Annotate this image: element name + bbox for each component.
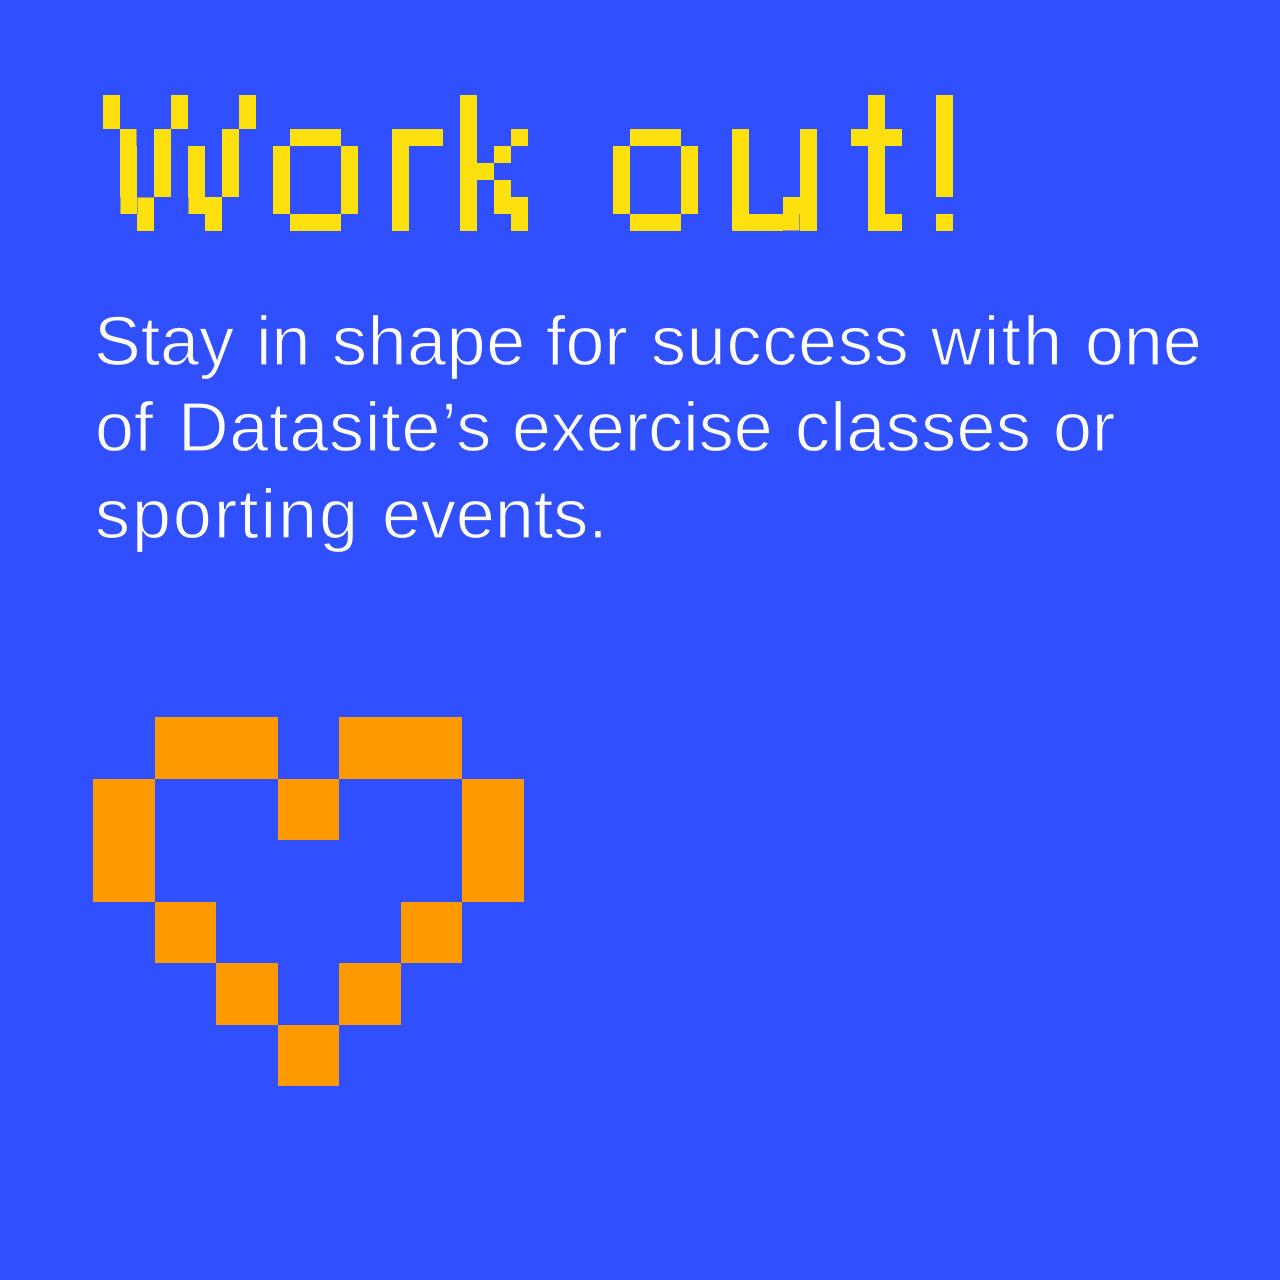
text block: intro copy: of: [95, 388, 154, 466]
text block: intro copy: for: [546, 302, 628, 380]
title: ork out!: [266, 52, 969, 273]
title: W: [102, 54, 254, 274]
text block: intro copy: success: [651, 302, 909, 380]
text block: intro copy: in: [256, 302, 310, 380]
text block: intro copy: with: [930, 302, 1064, 380]
text block: intro copy: or: [1053, 388, 1115, 466]
text block: intro copy: [94, 302, 1202, 553]
text block: intro copy: Datasite’s: [178, 388, 492, 466]
text block: intro copy: classes: [795, 388, 1031, 466]
text block: intro copy: one: [1085, 302, 1202, 380]
text block: intro copy: Stay: [94, 302, 234, 380]
text block: intro copy: sporting: [95, 475, 360, 553]
text block: intro copy: exercise: [512, 388, 773, 466]
icon: pixel heart: [93, 717, 524, 1086]
text block: intro copy: shape: [332, 302, 526, 380]
text block: intro copy: events.: [382, 475, 608, 553]
